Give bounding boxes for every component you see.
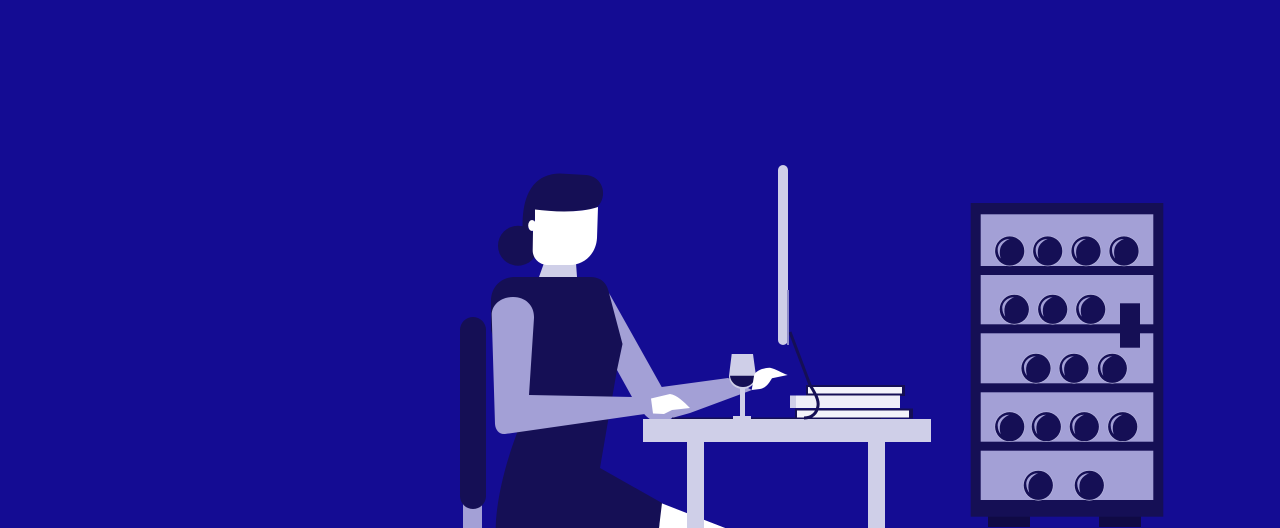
white leg (659, 503, 725, 528)
hair bun (498, 226, 538, 266)
bottles row 2 (999, 294, 1106, 326)
far hand (752, 368, 788, 390)
white leg behind desk (704, 520, 725, 528)
ear (528, 220, 536, 231)
dress (491, 277, 662, 528)
books (790, 385, 913, 418)
wine cabinet (971, 203, 1163, 527)
bottles row 4 (994, 411, 1138, 444)
shelves (981, 214, 1153, 500)
near arm (492, 297, 645, 434)
near hand (651, 394, 690, 414)
hair (523, 174, 603, 228)
bottles row 1 (994, 236, 1139, 268)
far arm (609, 293, 752, 422)
cable (790, 332, 810, 385)
desk (643, 418, 931, 528)
cabinet handle (1120, 303, 1140, 348)
wine glass (729, 354, 756, 420)
cabinet body (971, 203, 1163, 517)
cabinet feet (988, 516, 1141, 527)
neck (539, 263, 577, 277)
woman (491, 174, 752, 528)
cable shadow on stand (787, 290, 789, 345)
face (533, 207, 598, 265)
chair (460, 317, 486, 528)
monitor (778, 165, 810, 385)
bottles row 5 (1023, 470, 1105, 502)
bottles row 3 (1021, 353, 1128, 385)
